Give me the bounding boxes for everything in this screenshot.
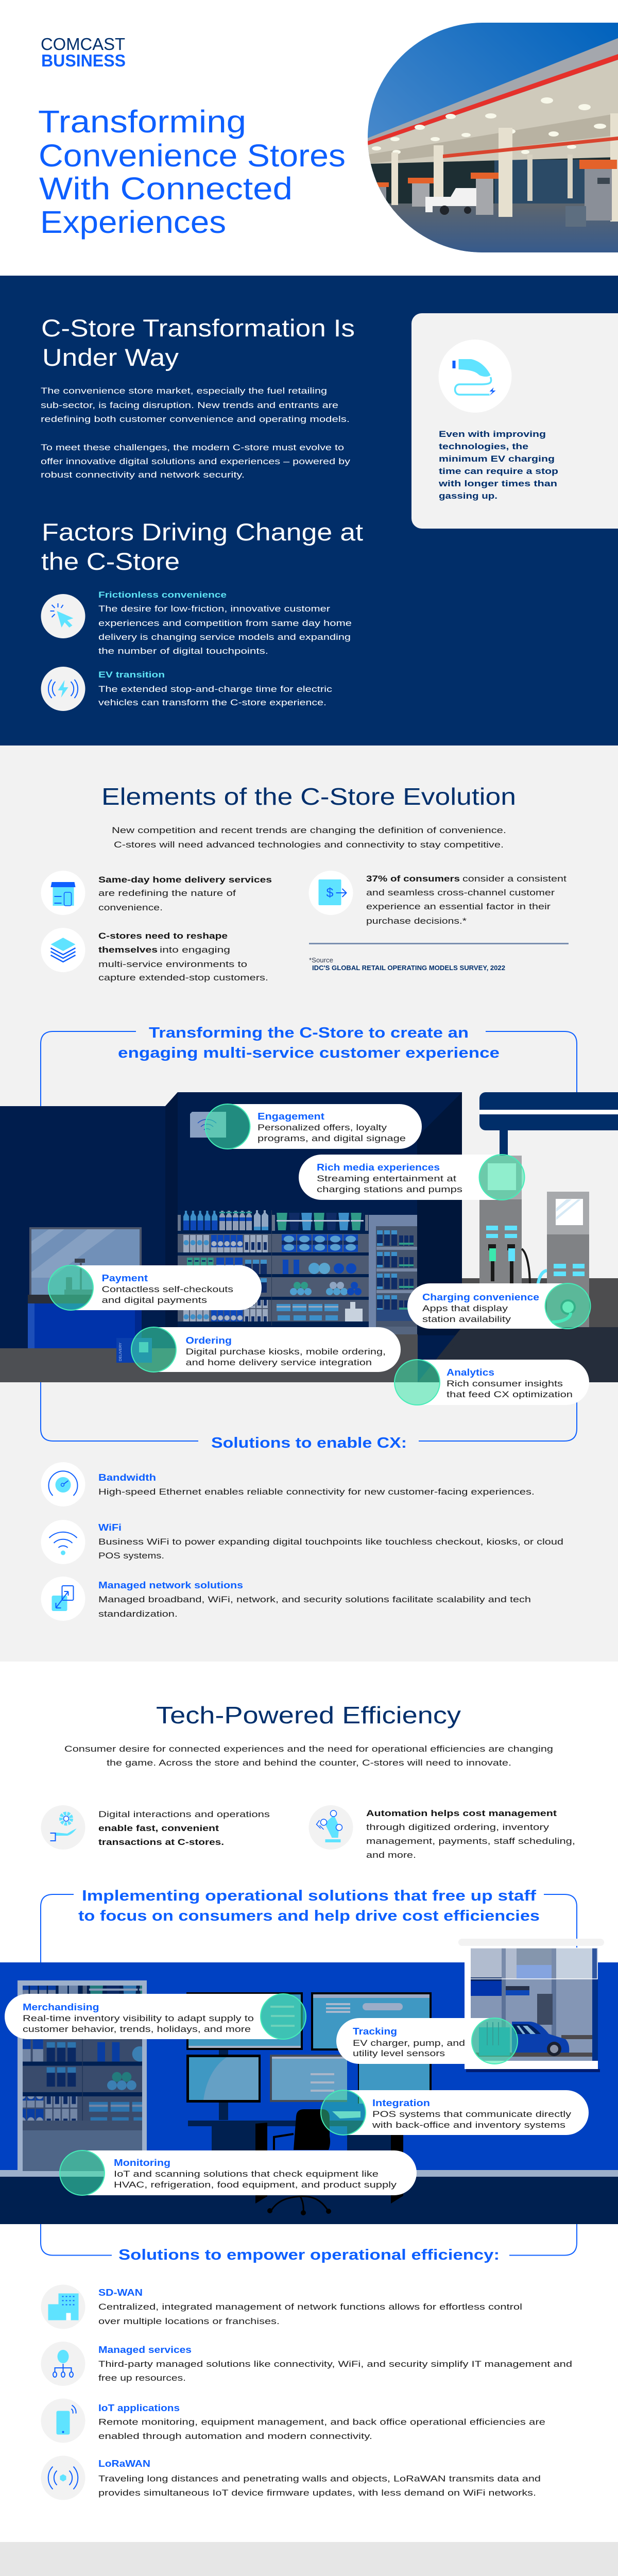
solution: SD-WAN: over multiple locations or franchises. — [98, 2316, 280, 2326]
callout: analytics: that feed CX optimization — [447, 1389, 573, 1399]
desk and chair — [188, 2109, 404, 2215]
icon: radio signal — [41, 2455, 85, 2500]
callout: tracking: EV charger, pump, and — [353, 2038, 465, 2048]
canopy — [479, 1092, 618, 1159]
callout: monitoring: HVAC, refrigeration, food equipment, and product supply — [114, 2180, 397, 2190]
heading: Factors Driving Change — [41, 518, 363, 575]
callout: tracking: utility level sensors — [353, 2048, 445, 2058]
icon: managed network — [41, 1577, 85, 1621]
solution: managed network solutions — [41, 1577, 531, 1621]
callout: charging convenience — [407, 1283, 590, 1329]
icon: speedometer — [41, 1462, 85, 1506]
heading: C-Store Transformation Is Under Way: Under Way — [42, 344, 179, 371]
text: same-day home delivery: convenience. — [98, 903, 163, 912]
logo: Comcast Business: BUSINESS — [41, 51, 126, 70]
solution: LoRaWAN: provides simultaneous IoT device firmware updates, with less demand on WiFi networks. — [98, 2488, 536, 2498]
text: EV transition: The extended stop-and-charge time for electric — [98, 684, 333, 694]
icon: cursor click — [41, 594, 85, 638]
solution: SD-WAN — [41, 2284, 522, 2329]
callout: rich media experiences: Streaming entertainment at — [317, 1174, 456, 1183]
text: automation: through digitized ordering, inventory — [366, 1822, 550, 1832]
callout: tracking: Tracking — [353, 2026, 397, 2037]
callout: rich media experiences — [299, 1155, 524, 1200]
solution: managed network solutions: standardization. — [98, 1609, 178, 1619]
solution: SD-WAN: Centralized, integrated management of network functions allows for effortless control — [98, 2302, 522, 2312]
title: Experiences — [40, 205, 226, 240]
text: EV transition: EV transition — [98, 670, 165, 680]
solution: IoT applications — [41, 2399, 545, 2443]
text: reshape themselves: capture extended-stop customers. — [98, 973, 268, 982]
text block: intro: Consumer desire for connected experiences and the need for operational efficiencies are changing — [64, 1744, 553, 1754]
illustration: back office — [0, 1939, 618, 2224]
callout: rich media experiences: Rich media experiences — [317, 1162, 440, 1173]
callout: merchandising: customer behavior, trends, holidays, and more — [23, 2024, 251, 2034]
callout: payment: and digital payments — [102, 1295, 207, 1305]
solution: WiFi: Business WiFi to power expanding digital touchpoints like touchless checkout, kiosks, or cloud — [98, 1537, 563, 1547]
source note — [309, 956, 505, 972]
text: frictionless convenience: the number of digital touchpoints. — [98, 646, 268, 656]
heading: implementing operational solutions — [78, 1888, 540, 1924]
callout: monitoring: IoT and scanning solutions that check equipment like — [114, 2169, 379, 2179]
solution: managed services — [41, 2342, 572, 2386]
text: frictionless convenience: experiences and competition from same day home — [98, 618, 352, 628]
icon: wifi — [41, 1520, 85, 1564]
solution: LoRaWAN — [41, 2455, 541, 2500]
solution: managed services: free up resources. — [98, 2373, 186, 2383]
heading: Tech-Powered Efficiency: Tech-Powered Efficiency — [156, 1702, 461, 1728]
callout: monitoring — [60, 2150, 417, 2195]
icon: storefront — [41, 871, 85, 915]
heading: C-Store Transformation Is Under Way — [41, 314, 355, 371]
text: frictionless convenience: Frictionless convenience — [98, 590, 227, 600]
title: Transforming — [38, 104, 246, 139]
callout: payment: Payment — [102, 1273, 148, 1283]
charging pump 2 — [547, 1192, 589, 1327]
callout: ordering — [131, 1327, 401, 1372]
callout: rich media experiences: charging stations and pumps — [317, 1184, 462, 1194]
solution: managed services: Managed services — [98, 2345, 192, 2355]
text: 37% of consumers: experience an essential factor in their — [366, 902, 551, 911]
callout: ordering: and home delivery service integration — [185, 1358, 372, 1367]
text block: intro: To meet these challenges, the modern C-store must evolve to — [41, 443, 344, 452]
text: 37% of consumers: purchase decisions.* — [366, 916, 467, 926]
text: reshape themselves: into engaging — [160, 945, 230, 955]
heading: solutions to enable CX: Solutions to enable CX: — [211, 1435, 407, 1451]
text block: intro: redefining both customer convenience and operating models. — [41, 414, 350, 424]
icon: EV plug — [439, 340, 512, 413]
text: callout copy: minimum EV charging — [439, 454, 555, 464]
text: automation — [366, 1808, 575, 1860]
heading: transforming the C-store: engaging multi-service customer experience — [118, 1045, 500, 1061]
text block: intro: sub-sector, is facing disruption. New trends and entrants are — [41, 400, 338, 410]
text block: intro: offer innovative digital solutions and experiences – powered by — [41, 456, 351, 466]
heading: transforming the C-store: Transforming the C-Store to create an — [149, 1025, 469, 1041]
solution: IoT applications: enabled through automation and modern connectivity. — [98, 2431, 372, 2441]
icon: phone signal — [41, 2399, 85, 2443]
heading: transforming the C-store — [118, 1025, 500, 1061]
text block: intro — [41, 386, 351, 480]
icon: gear in hand — [41, 1805, 85, 1850]
photo: fuel station canopy at dusk — [368, 23, 618, 252]
text: callout copy: technologies, the — [439, 442, 528, 451]
callout: merchandising — [5, 1994, 306, 2039]
stock room shelves — [18, 1980, 147, 2171]
text: reshape themselves: multi-service environments to — [98, 959, 247, 969]
beverage cooler — [369, 1215, 417, 1334]
checkout counter — [28, 1227, 142, 1348]
icon: dollar transfer: $ — [327, 886, 334, 900]
panel: tech-powered efficiency — [0, 1662, 618, 2542]
solution: managed network solutions: Managed network solutions — [98, 1580, 243, 1590]
text block: intro: The convenience store market, especially the fuel retailing — [41, 386, 327, 396]
icon: dollar transfer — [309, 871, 353, 915]
forecourt window with car — [458, 1939, 604, 2072]
callout: integration: Integration — [372, 2098, 430, 2108]
text block: intro: New competition and recent trends are changing the definition of convenience. — [112, 825, 506, 835]
text: callout copy: with longer times than — [438, 479, 557, 488]
text block: intro: robust connectivity and network security. — [41, 470, 245, 480]
heading: Factors Driving Change: Factors Driving Change at — [42, 518, 363, 546]
text: callout copy: Even with improving — [439, 429, 546, 439]
solution: managed services: Third-party managed solutions like connectivity, WiFi, and security simplify IT management and — [98, 2359, 572, 2369]
floor — [0, 1334, 418, 1382]
text: same-day home delivery: Same-day home delivery services — [98, 875, 272, 885]
callout: engagement — [205, 1104, 422, 1149]
heading: solutions to empower operational efficiency: Solutions to empower operational efficiency: — [118, 2247, 500, 2263]
title: With Connected — [39, 171, 293, 206]
text: 37% of consumers: consider a consistent — [462, 874, 566, 884]
illustration: store interior and charging stations — [0, 1092, 618, 1405]
text: callout copy — [438, 429, 558, 501]
solution: WiFi: POS systems. — [98, 1551, 164, 1561]
title — [38, 104, 346, 240]
heading: Factors Driving Change: the C-Store — [41, 548, 180, 575]
text: digital interactions: enable fast, convenient — [98, 1823, 219, 1833]
text: 37% of consumers — [366, 874, 566, 926]
callout: merchandising: Real-time inventory visibility to adapt supply to — [23, 2013, 254, 2023]
heading: Elements of the C-Store Evolution: Elements of the C-Store Evolution — [101, 783, 516, 810]
solution: bandwidth — [41, 1462, 535, 1506]
text: same-day home delivery: are redefining the nature of — [98, 888, 236, 898]
callout: integration: with back-office and inventory systems — [372, 2120, 565, 2130]
callout: engagement: Personalized offers, loyalty — [258, 1123, 387, 1132]
heading: implementing operational solutions: to focus on consumers and help drive cost efficiencies — [78, 1908, 540, 1924]
product shelves — [178, 1210, 369, 1326]
solution: LoRaWAN: LoRaWAN — [98, 2459, 150, 2469]
text block: intro — [64, 1744, 553, 1768]
callout: monitoring: Monitoring — [114, 2158, 170, 2168]
icon: robotic arm — [309, 1805, 353, 1850]
wifi sign — [190, 1112, 226, 1138]
text: reshape themselves — [98, 931, 268, 982]
callout: charging convenience: station availability — [422, 1314, 511, 1324]
panel: C-store transformation — [0, 276, 618, 745]
text: digital interactions: Digital interactions and operations — [98, 1809, 270, 1819]
text: callout copy: gassing up. — [439, 491, 497, 501]
text: reshape themselves: themselves — [98, 945, 158, 955]
logo: Comcast Business — [41, 35, 126, 70]
callout: ordering: Ordering — [185, 1335, 232, 1346]
callout: tracking — [336, 2018, 518, 2064]
text: automation: and more. — [366, 1850, 416, 1860]
callout: integration — [321, 2090, 589, 2135]
source note: *Source — [309, 956, 333, 964]
callout card: EV charging time — [411, 313, 618, 529]
text: 37% of consumers: 37% of consumers — [366, 874, 460, 884]
text: frictionless convenience: The desire for low-friction, innovative customer — [98, 604, 330, 614]
solution: bandwidth: High-speed Ethernet enables reliable connectivity for new customer-facing experiences. — [98, 1487, 535, 1497]
icon: EV signal bolt — [41, 667, 85, 711]
icon: stacked layers — [41, 928, 85, 972]
text: 37% of consumers: and seamless cross-channel customer — [366, 888, 555, 897]
text: automation: Automation helps cost management — [366, 1808, 557, 1818]
text: frictionless convenience — [98, 590, 352, 656]
text: frictionless convenience: delivery is changing service models and expanding — [98, 632, 351, 642]
source note: IDC'S GLOBAL RETAIL OPERATING MODELS SURVEY, 2022 — [312, 964, 505, 972]
solution: managed network solutions: Managed broadband, WiFi, network, and security solutions facilitate scalability and tech — [98, 1595, 531, 1604]
icon: office buildings — [41, 2284, 85, 2329]
text: EV transition — [98, 670, 333, 707]
text: callout copy: time can require a stop — [439, 466, 558, 476]
delivery box: DELIVERY — [119, 1343, 123, 1361]
text: digital interactions: transactions at C-stores. — [98, 1837, 224, 1847]
callout: engagement: programs, and digital signage — [258, 1133, 406, 1143]
callout: analytics: Rich consumer insights — [447, 1379, 563, 1388]
panel: elements of the C-store evolution — [0, 745, 618, 1662]
text block: intro: the game. Across the store and behind the counter, C-stores will need to innovate. — [107, 1758, 511, 1768]
callout: integration: POS systems that communicate directly — [372, 2109, 572, 2119]
callout: payment — [48, 1265, 262, 1310]
text: digital interactions — [98, 1809, 270, 1847]
text: EV transition: vehicles can transform the C-store experience. — [98, 698, 327, 707]
callout: charging convenience: Charging convenience — [422, 1292, 539, 1302]
callout: ordering: Digital purchase kiosks, mobile ordering, — [185, 1347, 386, 1357]
charging pump 1 — [479, 1156, 547, 1327]
solution: WiFi — [41, 1520, 563, 1564]
page background: header — [0, 0, 618, 276]
heading: implementing operational solutions: Implementing operational solutions that free up staff — [82, 1888, 536, 1904]
callout: merchandising: Merchandising — [23, 2002, 99, 2012]
text block: intro — [112, 825, 506, 850]
icon: org tree — [41, 2342, 85, 2386]
logo: Comcast Business: COMCAST — [41, 35, 125, 54]
text: same-day home delivery — [98, 875, 272, 912]
callout: analytics — [394, 1360, 589, 1405]
text block: intro: C-stores will need advanced technologies and connectivity to stay competitive. — [114, 840, 504, 850]
title: Convenience Stores — [39, 138, 346, 173]
solution: bandwidth: Bandwidth — [98, 1472, 156, 1483]
solution: IoT applications: IoT applications — [98, 2403, 180, 2413]
heading: C-Store Transformation Is Under Way: C-Store Transformation Is — [41, 314, 355, 342]
panel: cybersecurity for growing risks — [0, 2542, 618, 2576]
monitors — [186, 1992, 432, 2120]
solution: SD-WAN: SD-WAN — [98, 2287, 143, 2298]
callout: payment: Contactless self-checkouts — [102, 1284, 233, 1294]
solution: LoRaWAN: Traveling long distances and penetrating walls and objects, LoRaWAN transmits data and — [98, 2474, 541, 2483]
callout: engagement: Engagement — [258, 1111, 324, 1122]
callout: analytics: Analytics — [447, 1367, 494, 1378]
solution: WiFi: WiFi — [98, 1522, 122, 1533]
delivery box — [116, 1338, 152, 1363]
text: automation: management, payments, staff scheduling, — [366, 1836, 575, 1846]
callout: charging convenience: Apps that display — [422, 1303, 508, 1313]
text: reshape themselves: C-stores need to reshape — [98, 931, 228, 941]
solution: IoT applications: Remote monitoring, equipment management, and back office operational efficiencies are — [98, 2417, 545, 2427]
